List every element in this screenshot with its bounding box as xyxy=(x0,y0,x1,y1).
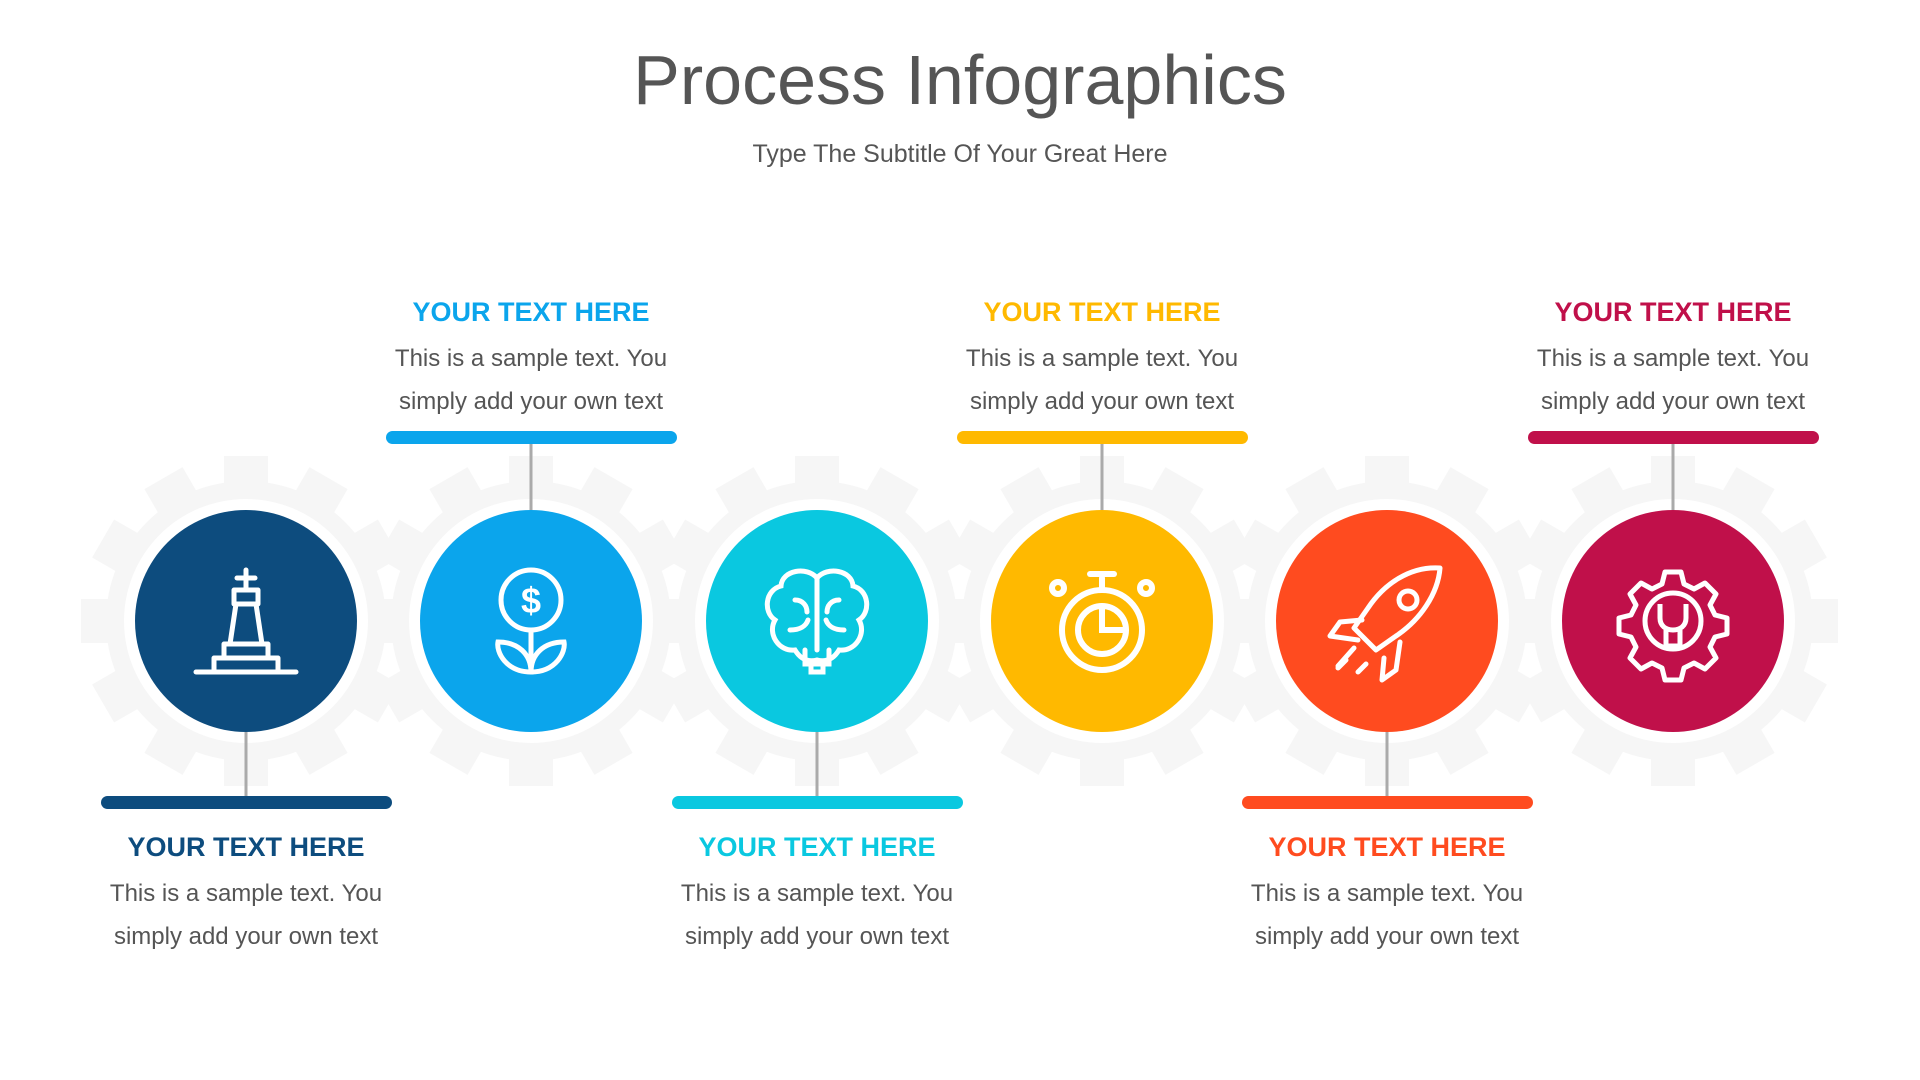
text block 4 (top): simply add your own text xyxy=(970,388,1234,415)
background gears xyxy=(81,456,1838,786)
text block 6 (top): YOUR TEXT HERE xyxy=(1554,297,1792,327)
text block 3 (bottom): simply add your own text xyxy=(685,923,949,950)
text block 3 (bottom) xyxy=(681,832,953,950)
icon: stopwatch xyxy=(1052,574,1152,670)
icon: brain xyxy=(767,571,867,672)
icon: gear wrench xyxy=(1619,572,1727,680)
text block 4 (top): YOUR TEXT HERE xyxy=(983,297,1221,327)
text block 6 (top): This is a sample text. You xyxy=(1537,345,1809,372)
text block 2 (top): This is a sample text. You xyxy=(395,345,667,372)
text block 5 (bottom): This is a sample text. You xyxy=(1251,880,1523,907)
text block 3 (bottom): This is a sample text. You xyxy=(681,880,953,907)
text block 6 (top): simply add your own text xyxy=(1541,388,1805,415)
text block 4 (top): This is a sample text. You xyxy=(966,345,1238,372)
text block 4 (top) xyxy=(966,297,1238,415)
text block 2 (top) xyxy=(395,297,667,415)
text block 1 (bottom): YOUR TEXT HERE xyxy=(127,832,365,862)
subtitle: Type The Subtitle Of Your Great Here xyxy=(752,140,1168,168)
text block 2 (top): simply add your own text xyxy=(399,388,663,415)
icon: chess king xyxy=(196,570,296,672)
text block 1 (bottom): simply add your own text xyxy=(114,923,378,950)
text block 3 (bottom): YOUR TEXT HERE xyxy=(698,832,936,862)
text block 1 (bottom) xyxy=(110,832,382,950)
title: Process Infographics xyxy=(633,41,1287,119)
text block 1 (bottom): This is a sample text. You xyxy=(110,880,382,907)
text block 5 (bottom): YOUR TEXT HERE xyxy=(1268,832,1506,862)
connectors and bars xyxy=(246,443,1673,798)
text block 6 (top) xyxy=(1537,297,1809,415)
text block 5 (bottom): simply add your own text xyxy=(1255,923,1519,950)
icon: money plant: $ xyxy=(521,580,541,621)
text block 2 (top): YOUR TEXT HERE xyxy=(412,297,650,327)
circles xyxy=(135,510,1784,732)
icon: rocket xyxy=(1330,568,1440,680)
icon: money plant xyxy=(498,570,564,672)
text block 5 (bottom) xyxy=(1251,832,1523,950)
